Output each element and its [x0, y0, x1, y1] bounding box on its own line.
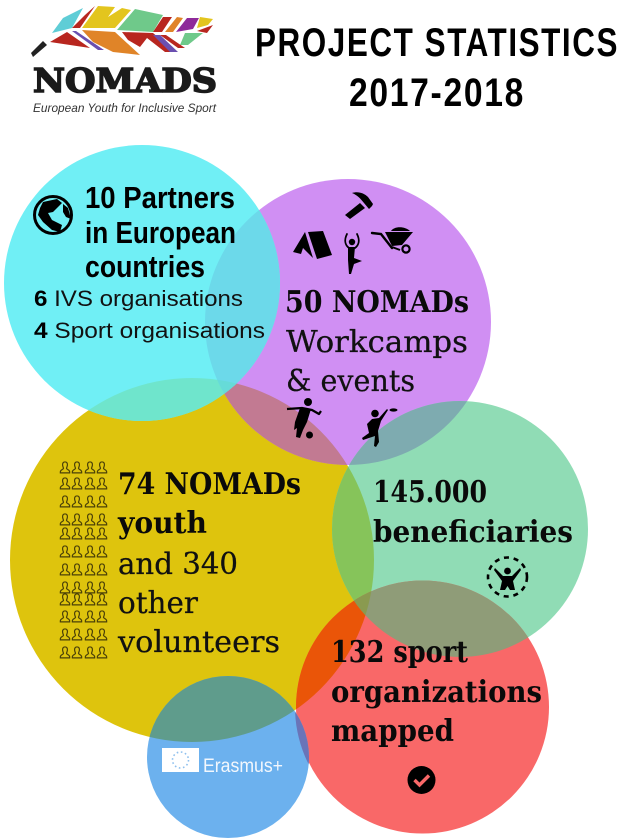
heading: 74 NOMADs youth [117, 467, 301, 541]
icon: grid of people [60, 462, 107, 658]
heading: 74 NOMADs youth: 74 NOMADs [118, 467, 301, 502]
icon: check mark [408, 766, 436, 794]
text: 132 sport organizations mapped: 132 sport [331, 635, 468, 670]
text: workcamps and events: & events [286, 364, 415, 399]
icon: globe [34, 196, 72, 234]
heading: 10 partners: countries [85, 249, 205, 284]
panel: volunteers [60, 462, 301, 660]
icon: EU flag [162, 748, 199, 772]
text: 132 sport organizations mapped [331, 635, 542, 749]
icon: yoga figure [345, 234, 362, 274]
icon: feather [31, 6, 213, 57]
heading: 50 NOMADs: 50 NOMADs [285, 285, 469, 320]
text: Erasmus+: Erasmus+ [203, 756, 283, 777]
heading: 74 NOMADs youth: youth [117, 506, 207, 541]
logo: NOMADS [31, 6, 217, 115]
venn circles [4, 145, 588, 838]
text: other volunteers: volunteers [117, 625, 280, 660]
text: workcamps and events: Workcamps [286, 325, 468, 360]
icon: frisbee player [362, 408, 398, 447]
title: 2017-2018 [349, 71, 525, 115]
text: 145.000 beneficiaries: 145.000 [373, 475, 487, 510]
heading: 10 partners: 10 Partners [85, 180, 235, 215]
icon: tent [293, 231, 332, 259]
logo: Erasmus+ [162, 748, 283, 777]
text: workcamps and events [286, 325, 468, 399]
heading: 10 partners [85, 180, 236, 284]
icon: cheering person [488, 558, 527, 596]
icon: wheelbarrow [372, 227, 413, 253]
heading: 10 partners: in European [85, 215, 236, 250]
icon: hammer [345, 192, 373, 219]
text: other volunteers [117, 547, 280, 660]
text: 145.000 beneficiaries [373, 475, 573, 550]
panel: beneficiaries [373, 475, 573, 596]
panel: workcamps [285, 192, 469, 447]
panel: sport organizations [331, 635, 542, 794]
text: 132 sport organizations mapped: mapped [331, 714, 454, 749]
tagline: European Youth for Inclusive Sport [33, 101, 217, 115]
text: IVS organisations: 6 IVS organisations [34, 286, 243, 311]
text: 145.000 beneficiaries: beneficiaries [373, 515, 573, 550]
icon: soccer player [287, 398, 321, 438]
wordmark: NOMADS [33, 61, 217, 100]
text: 132 sport organizations mapped: organizations [331, 675, 542, 710]
text: other volunteers: other [118, 586, 199, 621]
text: sport organisations: 4 Sport organisations [34, 318, 265, 343]
title [255, 21, 619, 115]
panel: partners [34, 180, 265, 343]
text: other volunteers: and 340 [118, 547, 238, 582]
